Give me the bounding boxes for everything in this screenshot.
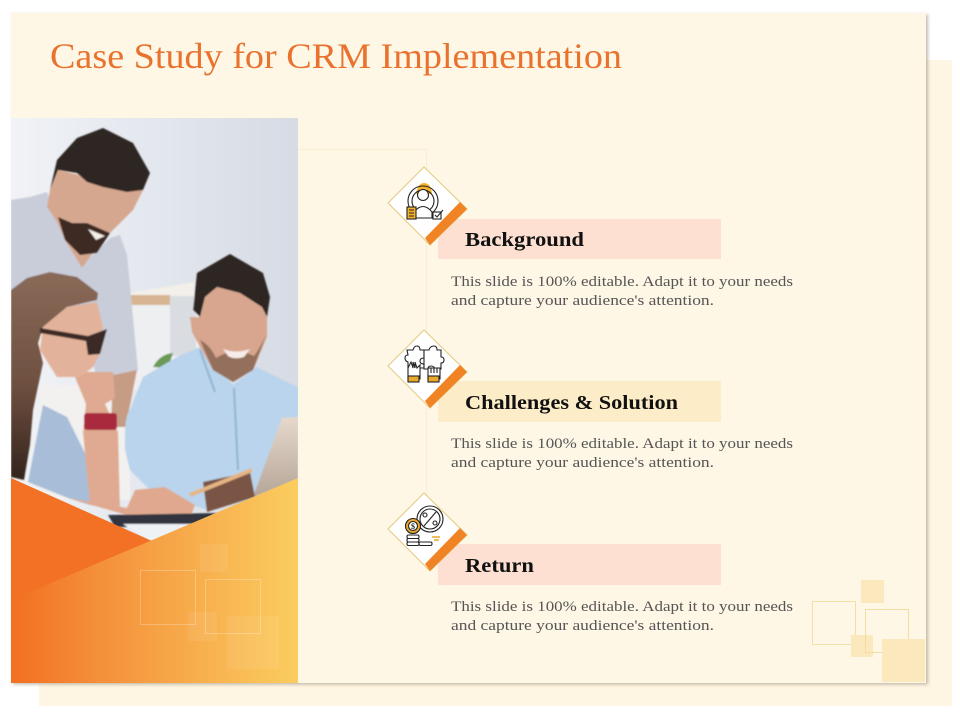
- icon: coins and percentage dial: $: [411, 522, 415, 531]
- woman: hand on desk: [68, 487, 195, 518]
- body text: and capture your audience's attention.: [451, 618, 714, 634]
- body text: This slide is 100% editable. Adapt it to your needs: [451, 436, 793, 452]
- man seated: shirt folds: [200, 350, 238, 470]
- heading bar: [438, 544, 721, 585]
- heading: Background: [465, 229, 584, 251]
- title: Case Study for CRM Implementation: [50, 36, 622, 76]
- diamond badge: [388, 330, 467, 408]
- diamond badge: [388, 167, 467, 245]
- man standing: smile: [88, 229, 105, 240]
- section: background: [388, 167, 793, 309]
- man seated: face: [190, 287, 267, 380]
- laptop: [253, 417, 298, 497]
- man standing: forearm: [111, 370, 137, 427]
- section: challenges and solution: [388, 330, 793, 471]
- shelf in background: [128, 282, 200, 390]
- card corner decorative squares: [812, 580, 925, 682]
- man seated: smile: [223, 349, 250, 358]
- diamond badge: [388, 493, 467, 571]
- woman: hair: [11, 272, 98, 480]
- body text: This slide is 100% editable. Adapt it to your needs: [451, 599, 793, 615]
- icon: hands holding puzzle pieces: [405, 346, 444, 382]
- woman: arm with hand: [73, 372, 120, 510]
- heading bar: [438, 381, 721, 422]
- man seated: hair: [193, 254, 270, 317]
- woman: shirt: [28, 405, 92, 505]
- connector line: [298, 150, 426, 520]
- pencil: [190, 470, 252, 495]
- band decorative squares: [140, 544, 279, 669]
- desk items: [108, 513, 217, 527]
- photo: three colleagues at a laptop: [11, 118, 298, 543]
- woman: glasses: [40, 328, 107, 355]
- gradient band: [11, 478, 298, 683]
- man standing: neck and face: [47, 170, 143, 268]
- white area behind woman: [74, 394, 130, 500]
- man seated: forearm: [203, 472, 255, 512]
- heading: Return: [465, 555, 534, 577]
- body text: and capture your audience's attention.: [451, 455, 714, 471]
- icon: coins and percentage dial: [406, 506, 443, 546]
- woman: face: [40, 302, 103, 377]
- man standing: hair: [50, 128, 150, 192]
- woman: watch: [84, 413, 117, 430]
- body text: This slide is 100% editable. Adapt it to your needs: [451, 274, 793, 290]
- body text: [451, 274, 793, 309]
- man seated: shirt: [125, 347, 298, 510]
- man standing: beard: [58, 217, 110, 255]
- man seated: stubble: [200, 335, 266, 382]
- body text: and capture your audience's attention.: [451, 293, 714, 309]
- man standing: shirt: [11, 192, 138, 378]
- body text: [451, 436, 793, 471]
- section: return: [388, 493, 793, 634]
- body text: [451, 599, 793, 634]
- icon: person at wheel with checklist: [407, 183, 443, 219]
- orange triangle: [11, 478, 152, 602]
- heading bar: [438, 219, 721, 259]
- heading: Challenges & Solution: [465, 392, 678, 414]
